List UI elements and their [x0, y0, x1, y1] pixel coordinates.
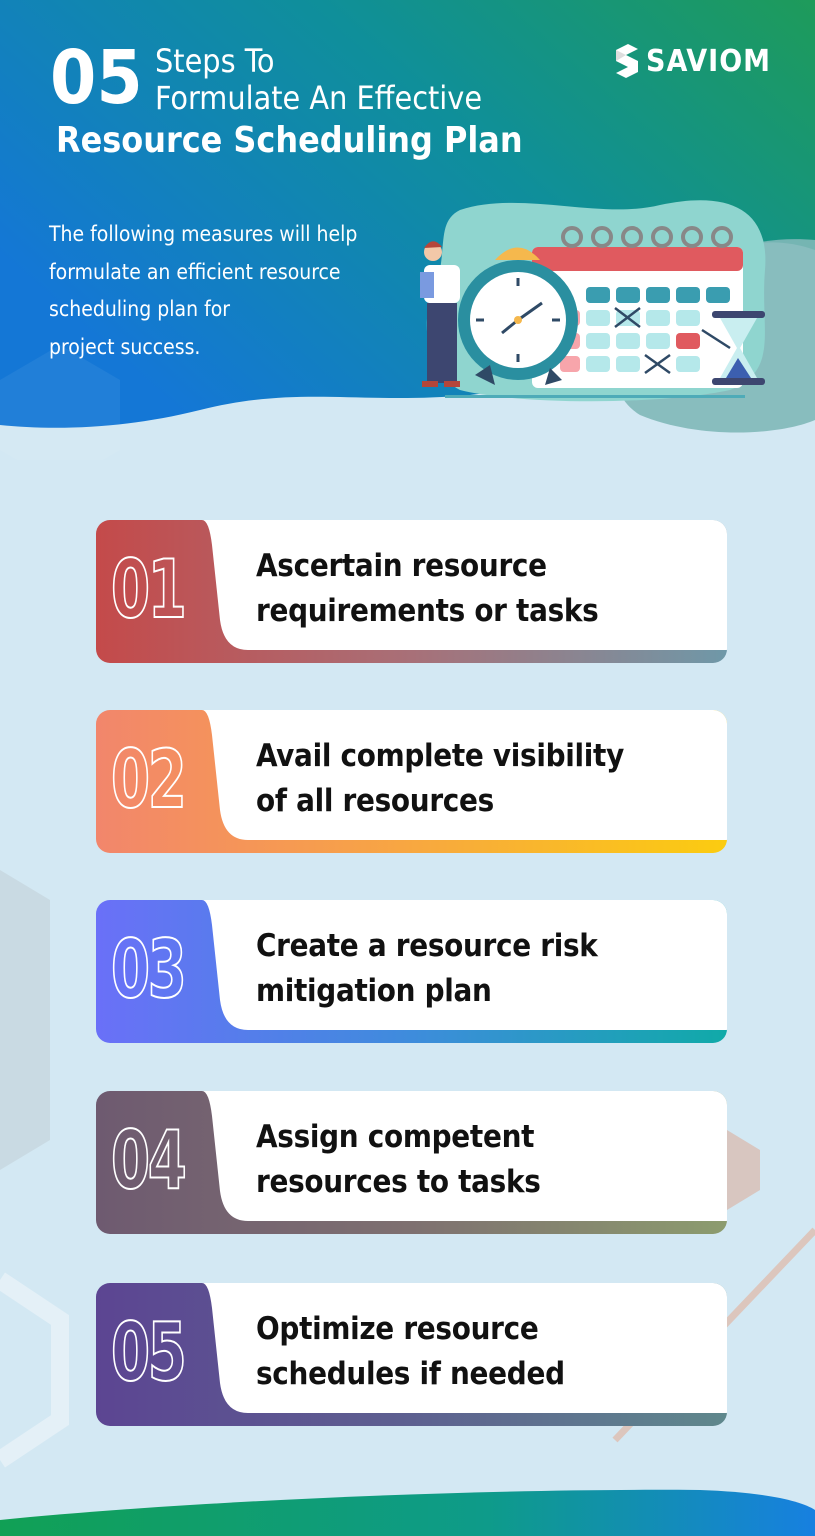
card 03: mitigation plan [256, 973, 492, 1009]
card 05: schedules if needed [256, 1356, 565, 1392]
card 05: Optimize resource [256, 1311, 538, 1347]
intro paragraph: The following measures will help formulate an efficient resource scheduling plan for [49, 222, 357, 321]
title [50, 35, 523, 161]
card 03: Create a resource risk [256, 928, 598, 964]
header background [0, 0, 815, 432]
card 02: Avail complete visibility [256, 738, 624, 774]
decorative hexes [0, 870, 815, 1536]
illustration: clock, calendar, man, hourglass [420, 200, 766, 402]
card 03 [96, 900, 727, 1043]
card 01 [96, 520, 727, 663]
title: 05 [50, 35, 143, 121]
card 04: resources to tasks [256, 1164, 541, 1200]
card 04 [96, 1091, 727, 1234]
title: Steps To [155, 42, 274, 80]
card 04: Assign competent [256, 1119, 534, 1155]
logo: SAVIOM: SAVIOM [646, 44, 771, 79]
card 02 [96, 710, 727, 853]
card 02: of all resources [256, 783, 494, 819]
card 01: requirements or tasks [256, 593, 598, 629]
title: Formulate An Effective [155, 79, 482, 117]
intro paragraph: project success. [49, 334, 200, 358]
card 01: Ascertain resource [256, 548, 547, 584]
card 05 [96, 1283, 727, 1426]
title: Resource Scheduling Plan [56, 120, 523, 161]
